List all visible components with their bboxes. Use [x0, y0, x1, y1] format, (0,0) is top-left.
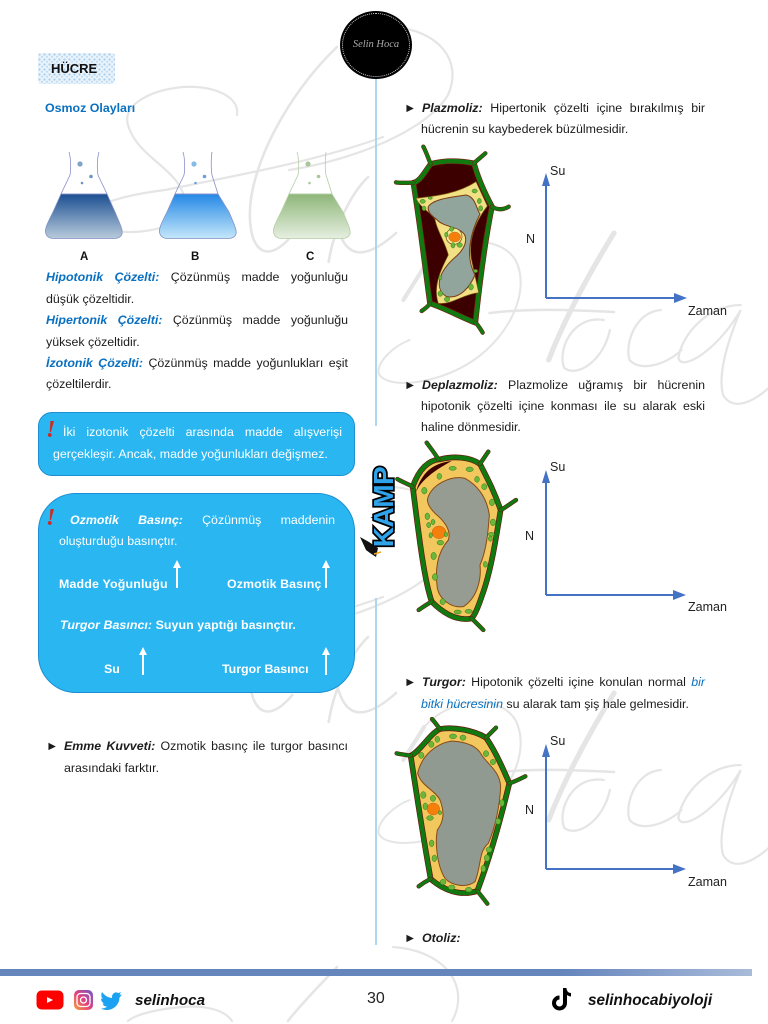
text block: Deplazmoliz: Deplazmoliz: Plazmolize uğramış bir hücrenin: [422, 378, 705, 392]
graph: plasmolysis axes: Zaman: [688, 304, 727, 318]
text block: Turgor: ►: [404, 675, 416, 689]
text block: Emme Kuvveti: arasındaki farktır.: [64, 761, 159, 775]
icon: youtube: [36, 990, 64, 1010]
graph: deplasmolysis axes: N: [525, 529, 534, 543]
icon: exclamation: !: [46, 505, 55, 531]
logo badge: Selin Hoca: [353, 39, 399, 50]
text block: solutions definitions: [46, 270, 348, 391]
text block: Plazmoliz: Plazmoliz: Hipertonik çözelti içine bırakılmış bir: [422, 101, 705, 115]
text block: solutions definitions: çözeltilerdir.: [46, 377, 111, 391]
text block: Plazmoliz: [404, 101, 705, 136]
graph: deplasmolysis axes: [525, 460, 727, 614]
KAMP badge: [360, 466, 399, 557]
heading badge: HÜCRE: HÜCRE: [51, 61, 97, 76]
graph: plasmolysis axes: N: [526, 232, 535, 246]
text block: Emme Kuvveti: ►: [46, 739, 58, 753]
vertical divider lower: [375, 598, 376, 945]
text block: Turgor: bitki hücresinin su alarak tam şiş hale gelmesidir.: [421, 697, 689, 711]
panel: osmotic and turgor pressure: [38, 493, 355, 693]
text block: solutions definitions: düşük çözeltidir.: [46, 292, 134, 306]
text block: Turgor: [404, 675, 706, 711]
footer: handle selinhocabiyoloji: selinhocabiyoloji: [588, 992, 712, 1009]
logo badge: [340, 11, 412, 79]
text block: Deplazmoliz: [404, 378, 705, 434]
graph: deplasmolysis axes: Zaman: [688, 600, 727, 614]
subheading: Osmoz Olayları: Osmoz Olayları: [45, 101, 135, 115]
footer: social icons left: [36, 990, 122, 1010]
icon: exclamation: !: [46, 417, 55, 443]
text: Otoliz: [404, 931, 461, 945]
flask labels: C: [306, 251, 314, 263]
text: Otoliz: Otoliz:: [422, 931, 461, 945]
text block: Deplazmoliz: hipotonik çözelti içine konması ile su alarak eski: [421, 399, 705, 413]
text block: solutions definitions: yüksek çözeltidir.: [46, 335, 140, 349]
turgor relation: Turgor Basıncı: [222, 662, 309, 676]
footer: handle selinhoca: selinhoca: [135, 992, 205, 1009]
graph: turgor axes: Su: [550, 734, 565, 748]
osmotic pressure definition: [59, 513, 335, 548]
osmotic relation: Madde Yoğunluğu: [59, 577, 168, 591]
callout text: [53, 425, 342, 461]
osmotic relation: [59, 560, 330, 591]
icon: tiktok: [552, 988, 571, 1010]
flask C: [273, 152, 350, 238]
text block: Deplazmoliz: ►: [404, 378, 416, 392]
callout: isotonic note: [38, 412, 355, 476]
icon: graduation cap: [360, 537, 382, 557]
graph: turgor axes: [525, 734, 727, 889]
turgor pressure definition: Turgor Basıncı: Suyun yaptığı basınçtır.: [60, 618, 296, 632]
KAMP badge: KAMP: [368, 467, 399, 547]
icon: twitter: [101, 992, 122, 1010]
flask labels: B: [191, 251, 199, 263]
icon: instagram: [74, 990, 93, 1010]
flask B: [159, 152, 236, 238]
text block: Deplazmoliz: haline dönmesidir.: [421, 420, 521, 434]
text block: Plazmoliz: ►: [404, 101, 416, 115]
text block: Turgor: Turgor: Hipotonik çözelti içine konulan normal bir: [422, 675, 705, 689]
graph: turgor axes: Zaman: [688, 875, 727, 889]
flask A: [45, 152, 122, 238]
text block: solutions definitions: İzotonik Çözelti: Çözünmüş madde yoğunlukları eşit: [46, 356, 348, 370]
flask labels: [80, 251, 314, 263]
turgor relation: Su: [104, 662, 120, 676]
osmotic pressure definition: oluşturduğu basınçtır.: [59, 534, 177, 548]
footer bar: [0, 969, 752, 976]
graph: plasmolysis axes: Su: [550, 164, 565, 178]
graph: plasmolysis axes: [526, 164, 727, 318]
osmotic relation: Ozmotik Basınç: [227, 577, 321, 591]
heading badge: HÜCRE: [38, 53, 115, 84]
callout text: gerçekleşir. Ancak, madde yoğunlukları değişmez.: [53, 447, 328, 461]
text: Otoliz: ►: [404, 931, 416, 945]
text block: Emme Kuvveti: Emme Kuvveti: Ozmotik basınç ile turgor basıncı: [64, 739, 348, 753]
turgor relation: [104, 647, 330, 676]
flask labels: A: [80, 251, 88, 263]
text block: solutions definitions: Hipertonik Çözelti: Çözünmüş madde yoğunluğu: [46, 313, 348, 327]
osmotic pressure definition: Ozmotik Basınç: Çözünmüş maddenin: [70, 513, 335, 527]
text block: Plazmoliz: hücrenin su kaybederek büzülmesidir.: [421, 122, 628, 136]
vertical divider: [375, 78, 376, 426]
graph: turgor axes: N: [525, 803, 534, 817]
text block: Emme Kuvveti: [46, 739, 348, 775]
graph: deplasmolysis axes: Su: [550, 460, 565, 474]
callout text: İki izotonik çözelti arasında madde alışverişi: [63, 425, 342, 439]
page number: 30: [367, 990, 385, 1007]
text block: solutions definitions: Hipotonik Çözelti: Çözünmüş madde yoğunluğu: [46, 270, 348, 284]
